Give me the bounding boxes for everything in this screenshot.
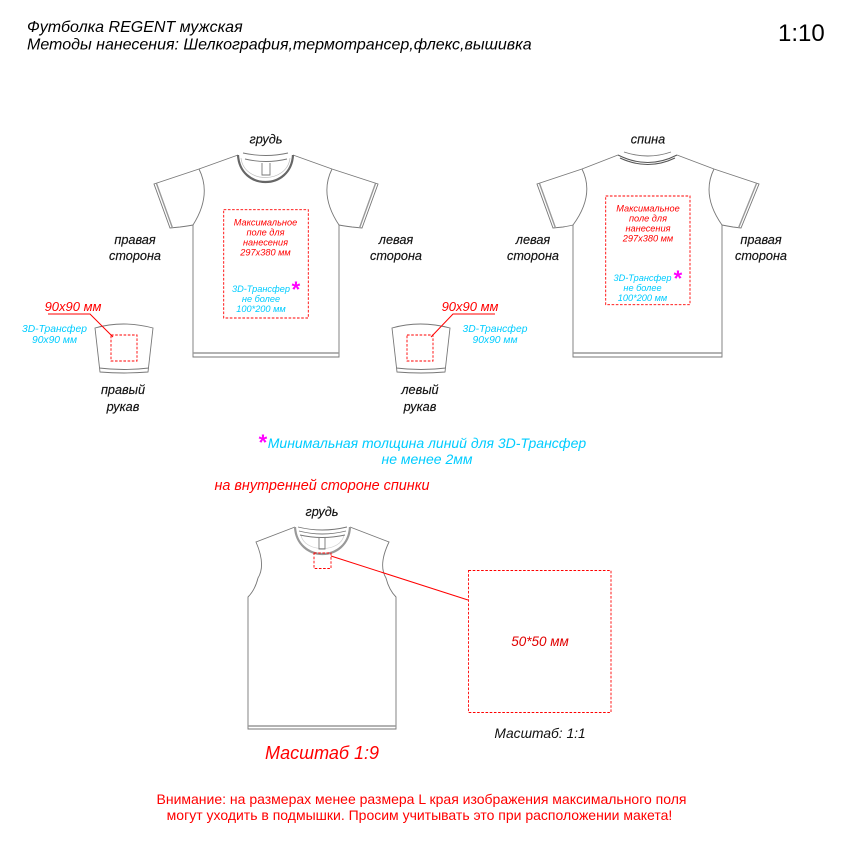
transfer label: 3D-Трансфер (22, 323, 87, 335)
transfer label (463, 323, 528, 346)
size label: 90х90 мм (442, 299, 499, 314)
large print area (468, 570, 611, 712)
print area text: нанесения (243, 238, 288, 248)
sleeve name: рукав (106, 400, 140, 414)
title (27, 19, 532, 54)
panel: inner back vest (248, 505, 611, 763)
title: Методы нанесения: Шелкография,термотрансер,флекс,вышивка (27, 36, 532, 54)
size label: 90х90 мм (45, 299, 102, 314)
scale 1:9: Масштаб 1:9 (265, 743, 379, 763)
print area text: Максимальное (616, 204, 680, 214)
print area text (616, 204, 680, 244)
side labels: сторона (109, 249, 161, 263)
icon: back shirt outline (537, 152, 759, 357)
print area text: 297х380 мм (239, 248, 291, 258)
3D transfer text: не более (242, 294, 280, 304)
3D transfer text: 3D-Трансфер (614, 273, 671, 283)
side labels (507, 233, 787, 263)
icon: left sleeve outline (392, 324, 450, 373)
scale label 1:10: 1:10 (778, 20, 825, 47)
transfer label: 90х90 мм (472, 335, 518, 346)
print area text: поле для (247, 228, 285, 238)
print area text: нанесения (625, 224, 671, 234)
3D transfer text: 100*200 мм (618, 293, 668, 303)
sleeve name: рукав (403, 400, 437, 414)
warning (156, 791, 686, 823)
transfer label: 90х90 мм (32, 335, 77, 346)
panel: back t-shirt (507, 132, 787, 357)
panel: front t-shirt (109, 132, 422, 357)
note: minimum line width: Минимальная толщина линий для 3D-Трансфер (268, 435, 586, 451)
leader line (48, 314, 113, 337)
side labels: сторона (370, 249, 422, 263)
icon: front shirt outline (154, 153, 378, 357)
print area text: Максимальное (234, 218, 297, 228)
side labels: правая (114, 233, 156, 247)
transfer label: 3D-Трансфер (463, 323, 528, 335)
small print area (314, 553, 331, 568)
side labels: левая (515, 233, 550, 247)
3D transfer text: * (291, 277, 301, 302)
print area (606, 196, 690, 305)
side labels: сторона (735, 249, 787, 263)
3D transfer text (614, 266, 683, 303)
sleeve name: левый (400, 383, 439, 397)
print area text: 297х380 мм (622, 234, 674, 244)
sleeve name (400, 383, 439, 414)
leader line (331, 556, 468, 600)
warning: могут уходить в подмышки. Просим учитывать это при расположении макета! (167, 807, 672, 823)
3D transfer text: 3D-Трансфер (232, 284, 290, 294)
3D transfer text: не более (623, 283, 662, 293)
side labels: левая (378, 233, 413, 247)
side labels (109, 233, 422, 263)
icon: right sleeve outline (95, 324, 153, 373)
print area text (234, 218, 297, 258)
label: chest: грудь (306, 505, 338, 519)
sleeve name: правый (101, 383, 145, 397)
print area (111, 335, 137, 361)
scale 1:1: Масштаб: 1:1 (494, 726, 586, 741)
label: back: спина (631, 132, 665, 146)
panel: right sleeve (22, 299, 153, 414)
print area (224, 210, 308, 318)
note: minimum line width: не менее 2мм (382, 451, 473, 467)
note: minimum line width: * (258, 430, 268, 455)
leader line (431, 314, 495, 337)
transfer label (22, 323, 87, 346)
title: Футболка REGENT мужская (27, 19, 243, 36)
heading: inner back: на внутренней стороне спинки (214, 478, 430, 494)
size label: 50*50 мм (511, 634, 569, 649)
panel: left sleeve (392, 299, 528, 414)
side labels: сторона (507, 249, 559, 263)
side labels: правая (740, 233, 782, 247)
note: minimum line width (258, 430, 586, 467)
warning: Внимание: на размерах менее размера L края изображения максимального поля (156, 791, 686, 807)
3D transfer text: * (673, 266, 683, 291)
3D transfer text (232, 277, 301, 314)
label: chest: грудь (250, 132, 282, 146)
icon: vest outline (248, 527, 396, 729)
sleeve name (101, 383, 145, 414)
print area text: поле для (629, 214, 667, 224)
3D transfer text: 100*200 мм (236, 304, 286, 314)
print area (407, 335, 433, 361)
